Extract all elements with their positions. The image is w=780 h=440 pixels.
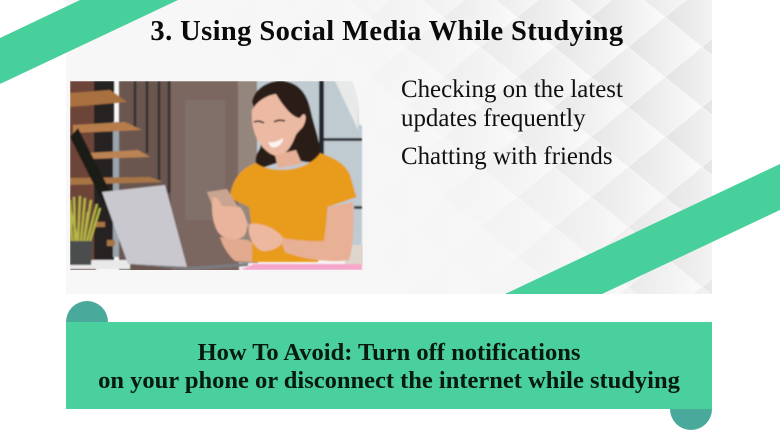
stair rails — [135, 81, 169, 193]
bullet text — [401, 76, 623, 170]
bullet text: Chatting with friends — [401, 143, 613, 170]
hair back — [252, 81, 320, 168]
green diagonal stripe: right — [505, 164, 780, 294]
hand on phone — [212, 197, 247, 239]
banner: how to avoid — [66, 322, 712, 409]
teal semicircle: bottom right — [670, 409, 712, 430]
phone — [207, 189, 250, 228]
pink folder — [240, 264, 362, 270]
forearm right — [280, 202, 354, 261]
forearm left — [220, 237, 252, 262]
neck — [275, 150, 302, 168]
plant — [70, 241, 93, 265]
laptop — [102, 185, 187, 267]
banner: how to avoid: How To Avoid: Turn off notifications — [198, 339, 580, 366]
title: 3. Using Social Media While Studying — [150, 16, 624, 47]
stair treads — [70, 90, 127, 107]
smile — [268, 138, 283, 147]
room background — [70, 81, 96, 271]
background panel: diamond pattern — [147, 0, 712, 294]
hand tapping — [249, 224, 283, 251]
teal semicircle: top left — [66, 301, 108, 322]
t-shirt — [230, 153, 357, 262]
bullet text: Checking on the latest — [401, 76, 623, 103]
eyes — [254, 120, 285, 123]
banner: how to avoid: on your phone or disconnect the internet while studying — [98, 367, 680, 394]
window — [257, 81, 362, 260]
face — [252, 94, 306, 156]
green diagonal stripe: top left — [0, 0, 178, 84]
desk — [70, 260, 130, 269]
photo: woman using phone at laptop — [70, 81, 363, 270]
bullet text: updates frequently — [401, 105, 586, 132]
